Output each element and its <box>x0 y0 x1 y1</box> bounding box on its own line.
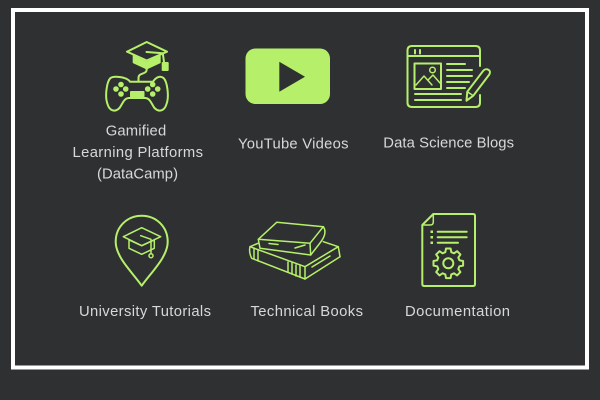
label: technical books: Technical Books <box>250 304 363 320</box>
label: gamified learning platforms: (DataCamp) <box>97 166 178 182</box>
icon: stacked books <box>250 222 340 279</box>
label: gamified learning platforms <box>72 124 203 182</box>
label: gamified learning platforms: Learning Platforms <box>72 145 203 161</box>
label: gamified learning platforms: Gamified <box>106 124 166 140</box>
icon: game controller with graduation cap <box>106 42 169 111</box>
icon: blog window with pencil <box>408 46 490 107</box>
label: youtube videos: YouTube Videos <box>238 136 348 152</box>
icon: document with gear <box>422 214 475 286</box>
icon: video play button <box>246 48 330 104</box>
label: university tutorials: University Tutorials <box>79 304 211 320</box>
label: data science blogs: Data Science Blogs <box>383 135 514 151</box>
label: documentation: Documentation <box>405 304 510 320</box>
icon: map pin with graduation cap <box>116 216 168 286</box>
